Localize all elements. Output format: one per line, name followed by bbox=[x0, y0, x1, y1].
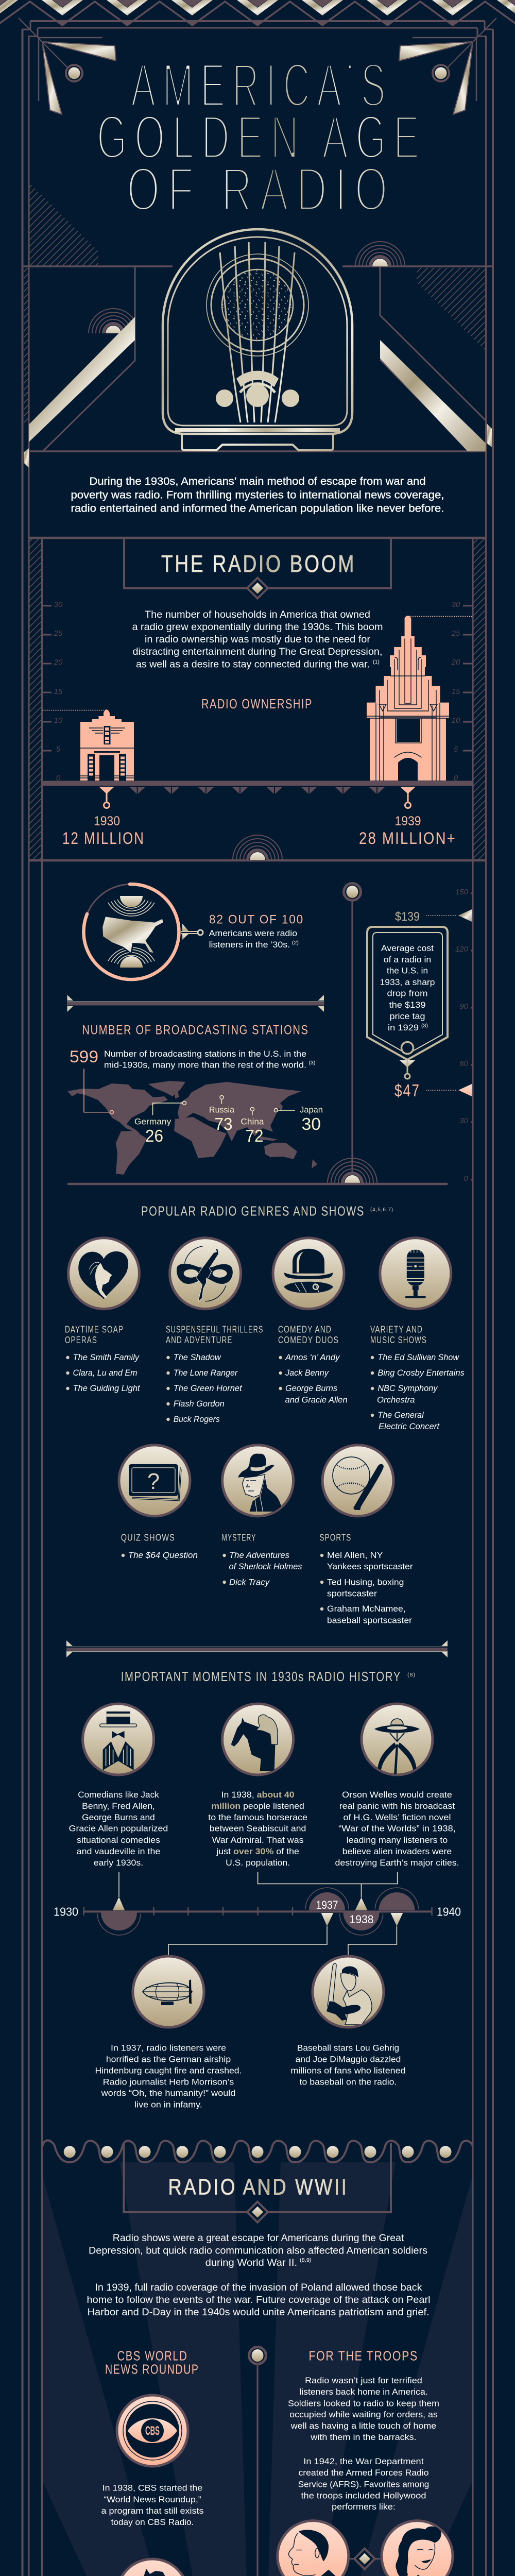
genre: sports bbox=[319, 1445, 413, 1625]
icon: mask and revolver bbox=[170, 1238, 241, 1309]
show list: Bing Crosby Entertains bbox=[377, 1368, 465, 1378]
text: real panic with his broadcast bbox=[339, 1802, 455, 1811]
performer connectors bbox=[302, 2549, 427, 2576]
icon: detective bbox=[222, 1445, 294, 1516]
title bbox=[97, 50, 426, 224]
show list bbox=[66, 1353, 141, 1393]
show list: Jack Benny bbox=[285, 1368, 330, 1378]
building: 1930 bbox=[80, 709, 134, 781]
icon: question card bbox=[119, 1445, 190, 1516]
show list: Amos ‘n’ Andy bbox=[285, 1353, 340, 1362]
us stat bbox=[70, 1047, 315, 1070]
moment: comedians bbox=[69, 1704, 168, 1868]
show list: Yankees sportscaster bbox=[327, 1562, 413, 1571]
moment: baseball bbox=[290, 1956, 406, 2087]
genre: soap operas bbox=[65, 1238, 141, 1393]
price axis bbox=[455, 888, 473, 1183]
title: OF RADIO bbox=[127, 155, 396, 224]
text: Americans were radio bbox=[209, 929, 297, 938]
ownership axis scales: 20 bbox=[54, 658, 63, 667]
text bbox=[208, 1790, 307, 1868]
label: SPORTS bbox=[319, 1533, 351, 1543]
text: well as having a little touch of home bbox=[290, 2421, 436, 2431]
heading: NUMBER OF BROADCASTING STATIONS bbox=[82, 1023, 309, 1038]
moment: war of the worlds bbox=[335, 1704, 459, 1868]
text: (2) bbox=[292, 940, 299, 946]
text: In 1938, CBS started the bbox=[102, 2484, 202, 2493]
hatched side bands bbox=[29, 538, 486, 860]
text bbox=[290, 2043, 406, 2087]
ownership axis scales: 30 bbox=[54, 600, 63, 609]
radio price column bbox=[328, 883, 473, 1208]
show list bbox=[222, 1551, 302, 1587]
text: today on CBS Radio. bbox=[111, 2518, 194, 2527]
ownership axis scales: 5 bbox=[454, 745, 458, 754]
paragraph: Harbor and D-Day in the 1940s would unite Americans patriotism and grief. bbox=[88, 2307, 430, 2318]
divider bbox=[67, 995, 324, 1012]
show list: George Burns bbox=[285, 1384, 337, 1393]
text: In 1938, about 40 bbox=[221, 1790, 295, 1800]
moment: hindenburg bbox=[95, 1956, 242, 2109]
$139 marker: $139 bbox=[395, 910, 420, 924]
building: 1939 bbox=[367, 616, 449, 781]
label: MYSTERY bbox=[221, 1533, 256, 1543]
text: a program that still exists bbox=[101, 2506, 204, 2516]
show list: Ted Husing, boxing bbox=[327, 1578, 404, 1587]
us stat: 599 bbox=[70, 1047, 98, 1066]
price callout: in 1929 bbox=[388, 1023, 419, 1032]
price axis: 150 bbox=[455, 888, 469, 896]
section rule bbox=[67, 1183, 448, 1185]
dotted level 1930 bbox=[42, 710, 106, 711]
show list: of Sherlock Holmes bbox=[229, 1562, 302, 1571]
text: leading many listeners to bbox=[347, 1836, 448, 1845]
art deco panels around the radio bbox=[23, 182, 492, 468]
text: performers like: bbox=[332, 2502, 396, 2512]
icon: martian tripod bbox=[362, 1704, 433, 1775]
section: radio and wwii bbox=[43, 2140, 473, 2576]
ownership axis scales: 25 bbox=[451, 629, 460, 638]
show list: and Gracie Allen bbox=[285, 1395, 348, 1404]
label: VARIETY AND bbox=[370, 1324, 423, 1334]
heading: FOR THE TROOPS bbox=[308, 2348, 418, 2364]
text: Benny, Fred Allen, bbox=[82, 1802, 155, 1811]
icon: horse and jockey bbox=[222, 1704, 294, 1775]
header decoration: chevrons and corner fans bbox=[0, 0, 515, 114]
text: the troops included Hollywood bbox=[301, 2492, 426, 2501]
price callout: Average cost bbox=[381, 944, 434, 953]
label bbox=[278, 1324, 339, 1345]
price callout bbox=[367, 927, 448, 1079]
show list bbox=[371, 1353, 465, 1431]
scallop border bbox=[43, 2140, 473, 2162]
text: occupied while waiting for orders, as bbox=[289, 2410, 438, 2419]
price axis: 30 bbox=[459, 1116, 469, 1125]
show list bbox=[320, 1551, 413, 1625]
text: situational comedies bbox=[77, 1836, 160, 1845]
icon: bowler hat and cigar bbox=[273, 1238, 344, 1309]
section: the radio boom bbox=[29, 538, 486, 885]
icon: question card: ? bbox=[147, 1469, 160, 1494]
price callout: the U.S. in bbox=[387, 967, 428, 976]
section: broadcasting stations bbox=[67, 1023, 323, 1175]
stat: 1939 bbox=[359, 814, 456, 848]
text: Orson Welles would create bbox=[342, 1790, 452, 1800]
text: Service (AFRS). Favorites among bbox=[298, 2480, 429, 2489]
show list: The Smith Family bbox=[73, 1353, 140, 1362]
show list: The Ed Sullivan Show bbox=[377, 1353, 459, 1362]
portrait: bob hope bbox=[278, 2521, 349, 2576]
show list: baseball sportscaster bbox=[327, 1616, 413, 1625]
show list bbox=[279, 1353, 348, 1404]
label: MUSIC SHOWS bbox=[370, 1335, 427, 1345]
text: “World News Roundup,” bbox=[104, 2495, 201, 2504]
price callout: drop from bbox=[387, 989, 427, 998]
label bbox=[370, 1324, 427, 1345]
map callouts: 30 bbox=[302, 1114, 321, 1133]
text: Soldiers looked to radio to keep them bbox=[288, 2399, 439, 2408]
timeline: 1938 bbox=[349, 1913, 374, 1926]
price callout: of a radio in bbox=[384, 955, 431, 964]
paragraph bbox=[132, 609, 383, 670]
text: horrified as the German airship bbox=[106, 2055, 231, 2064]
section heading box: RADIO AND WWII bbox=[168, 2174, 348, 2200]
radio illustration bbox=[163, 229, 352, 450]
text: George Burns and bbox=[82, 1813, 155, 1822]
text: and vaudeville in the bbox=[77, 1847, 160, 1856]
genre: comedy bbox=[273, 1238, 348, 1404]
world map bbox=[67, 1081, 317, 1175]
text: million people listened bbox=[211, 1802, 304, 1811]
heading: IMPORTANT MOMENTS IN 1930s RADIO HISTORY bbox=[121, 1669, 401, 1684]
icon: heart and woman bbox=[68, 1238, 139, 1309]
map callouts: Russia bbox=[209, 1106, 235, 1115]
icon: batter bbox=[313, 1956, 384, 2027]
text: believe alien invaders were bbox=[342, 1847, 452, 1856]
text: listeners in the ’30s. bbox=[209, 940, 290, 950]
paragraph: Depression, but quick radio communication also affected American soldiers bbox=[89, 2245, 427, 2256]
text: listeners back home in America. bbox=[299, 2387, 428, 2397]
text: destroying Earth’s major cities. bbox=[335, 1858, 459, 1868]
genre: thrillers bbox=[166, 1238, 264, 1424]
map callouts: Germany bbox=[134, 1117, 171, 1126]
show list: The Adventures bbox=[229, 1551, 289, 1560]
stat: 1930: 1930 bbox=[94, 814, 120, 828]
text: just over 30% of the bbox=[216, 1847, 299, 1856]
label: COMEDY AND bbox=[278, 1324, 332, 1334]
ownership axis scales: 0 bbox=[56, 774, 61, 783]
price callout: the $139 bbox=[389, 1001, 425, 1010]
show list: Graham McNamee, bbox=[327, 1604, 406, 1614]
text: millions of fans who listened bbox=[290, 2066, 406, 2075]
text: to baseball on the radio. bbox=[300, 2078, 397, 2087]
$139 marker bbox=[395, 909, 472, 924]
chart title: RADIO OWNERSHIP bbox=[201, 696, 313, 711]
ownership axis scales: 10 bbox=[452, 716, 460, 725]
timeline bbox=[54, 1872, 461, 1956]
arcs ornament bbox=[233, 835, 282, 885]
section: important moments timeline bbox=[54, 1669, 461, 2109]
ownership axis scales: 5 bbox=[56, 745, 61, 754]
show list: The General bbox=[377, 1411, 424, 1420]
section heading box: THE RADIO BOOM bbox=[161, 550, 356, 577]
paragraph: during World War II. bbox=[205, 2257, 297, 2268]
us stat: mid-1930s, many more than the rest of the world. bbox=[104, 1061, 306, 1070]
show list: Orchestra bbox=[377, 1395, 415, 1404]
text: Hindenburg caught fire and crashed. bbox=[95, 2066, 242, 2075]
timeline: 1930 bbox=[54, 1905, 78, 1918]
$47 marker: $47 bbox=[394, 1081, 420, 1100]
text: Radio journalist Herb Morrison’s bbox=[103, 2078, 234, 2087]
price callout: (3) bbox=[421, 1023, 428, 1029]
ownership axis scales: 30 bbox=[452, 600, 460, 609]
show list: The Lone Ranger bbox=[174, 1368, 238, 1378]
heading: POPULAR RADIO GENRES AND SHOWS bbox=[141, 1205, 365, 1219]
icon: airship bbox=[133, 1956, 204, 2027]
intro text: radio entertained and informed the American population like never before. bbox=[71, 503, 444, 515]
text: In 1942, the War Department bbox=[303, 2457, 424, 2466]
show list: Buck Rogers bbox=[174, 1415, 220, 1424]
label bbox=[65, 1324, 124, 1345]
label: COMEDY DUOS bbox=[278, 1335, 339, 1345]
map callouts: Japan bbox=[300, 1106, 323, 1115]
paragraph: (1) bbox=[373, 659, 380, 665]
ownership axis scales: 15 bbox=[54, 687, 63, 696]
text: and Joe DiMaggio dazzled bbox=[296, 2055, 401, 2064]
icon: baseball and bat bbox=[322, 1445, 393, 1516]
intro text: poverty was radio. From thrilling mysteries to international news coverage, bbox=[71, 489, 444, 501]
show list: The Green Hornet bbox=[174, 1384, 243, 1393]
stat: 1930: 12 MILLION bbox=[62, 829, 145, 848]
text: words “Oh, the humanity!” would bbox=[101, 2089, 235, 2098]
connector bbox=[181, 924, 203, 940]
show list: Dick Tracy bbox=[229, 1578, 270, 1587]
text bbox=[69, 1790, 168, 1868]
dotted level 1939 bbox=[408, 616, 473, 617]
divider bbox=[66, 1640, 448, 1657]
ownership axis scales: 10 bbox=[54, 716, 63, 725]
intro text: During the 1930s, Americans’ main method of escape from war and bbox=[90, 476, 425, 487]
text: 82 OUT OF 100 bbox=[209, 913, 304, 926]
ownership axis scales: 15 bbox=[452, 687, 460, 696]
paragraph: Radio shows were a great escape for Americans during the Great bbox=[113, 2232, 404, 2244]
price axis: 90 bbox=[459, 1002, 469, 1011]
us stat: Number of broadcasting stations in the U.S. in the bbox=[104, 1049, 306, 1059]
section: popular radio genres bbox=[65, 1205, 465, 1625]
show list: NBC Symphony bbox=[377, 1384, 438, 1393]
$47 marker bbox=[394, 1081, 472, 1100]
text: with them in the barracks. bbox=[310, 2433, 417, 2442]
text: created the Armed Forces Radio bbox=[299, 2468, 428, 2478]
text bbox=[288, 2376, 439, 2512]
ownership axis scales: 25 bbox=[54, 629, 63, 638]
center rail and pendant bbox=[249, 2347, 266, 2576]
us stat: (3) bbox=[309, 1060, 315, 1066]
paragraph: distracting entertainment during The Great Depression, bbox=[133, 646, 382, 657]
paragraph: in radio ownership was mostly due to the need for bbox=[145, 634, 371, 645]
paragraph: as well as a desire to stay connected during the war. bbox=[136, 658, 370, 670]
show list: The $64 Question bbox=[128, 1551, 198, 1560]
map callouts: 73 bbox=[214, 1114, 233, 1133]
text: of H.G. Wells’ fiction novel bbox=[343, 1813, 451, 1822]
text: to the famous horserace bbox=[208, 1813, 307, 1822]
portrait: dinah shore bbox=[382, 2521, 453, 2576]
timeline: 1937 bbox=[316, 1899, 338, 1911]
icon: cbs eye: CBS bbox=[145, 2424, 160, 2438]
price axis: 120 bbox=[455, 945, 469, 954]
stat: 1939: 1939 bbox=[394, 814, 421, 828]
timeline: 1940 bbox=[437, 1905, 461, 1918]
text bbox=[101, 2484, 204, 2527]
paragraph: a radio grew exponentially during the 1930s. This boom bbox=[132, 621, 383, 633]
text: Radio wasn’t just for terrified bbox=[305, 2376, 422, 2385]
paragraph: home to follow the events of the war. Future coverage of the attack on Pearl bbox=[87, 2294, 430, 2306]
text: “War of the Worlds” in 1938, bbox=[338, 1824, 456, 1834]
show list: Clara, Lu and Em bbox=[73, 1368, 137, 1378]
show list: sportscaster bbox=[327, 1589, 377, 1598]
genre: quiz shows bbox=[119, 1445, 198, 1560]
intro text bbox=[71, 476, 444, 515]
heading: (4,5,6,7) bbox=[370, 1207, 393, 1213]
icon: germany bbox=[117, 2559, 188, 2576]
heading: NEWS ROUNDUP bbox=[105, 2362, 199, 2377]
heading: (8) bbox=[407, 1672, 416, 1678]
column: for the troops bbox=[273, 2348, 453, 2576]
icon: microphone bbox=[380, 1238, 451, 1309]
paragraph bbox=[87, 2232, 430, 2318]
heading bbox=[105, 2348, 199, 2377]
stat: 82 out of 100 bbox=[83, 884, 304, 979]
section heading box bbox=[124, 2143, 391, 2223]
ownership axis scales: 0 bbox=[454, 774, 458, 783]
usa dial bbox=[83, 884, 179, 979]
text bbox=[95, 2043, 242, 2109]
paragraph: The number of households in America that owned bbox=[145, 609, 370, 620]
paragraph: In 1939, full radio coverage of the invasion of Poland allowed those back bbox=[95, 2282, 422, 2293]
show list: The Shadow bbox=[174, 1353, 221, 1362]
price axis: 60 bbox=[459, 1059, 469, 1068]
genre: variety bbox=[370, 1238, 465, 1431]
genre: mystery bbox=[221, 1445, 302, 1587]
stat: 1939: 28 MILLION+ bbox=[359, 829, 456, 848]
ownership axis scales: 20 bbox=[451, 658, 460, 667]
text bbox=[335, 1790, 459, 1868]
show list: Mel Allen, NY bbox=[327, 1551, 383, 1560]
icon: cbs eye bbox=[117, 2395, 188, 2466]
baseline axis with year markers bbox=[42, 781, 473, 808]
icon: hat, bow tie and vest bbox=[83, 1704, 154, 1775]
text: Gracie Allen popularized bbox=[69, 1824, 168, 1834]
sunburst rays bbox=[43, 2162, 472, 2576]
text: U.S. population. bbox=[226, 1858, 290, 1868]
label bbox=[166, 1324, 264, 1345]
column: cbs world news roundup bbox=[101, 2351, 203, 2576]
label: SUSPENSEFUL THRILLERS bbox=[166, 1324, 264, 1334]
show list: Electric Concert bbox=[379, 1422, 440, 1431]
show list: The Guiding Light bbox=[73, 1384, 141, 1393]
map callouts: 72 bbox=[245, 1126, 264, 1145]
text: Comedians like Jack bbox=[78, 1790, 160, 1800]
text: Baseball stars Lou Gehrig bbox=[297, 2043, 399, 2053]
map callouts: China bbox=[241, 1117, 264, 1126]
map callouts bbox=[84, 1069, 323, 1145]
price callout: 1933, a sharp bbox=[380, 978, 435, 987]
label: AND ADVENTURE bbox=[166, 1335, 233, 1345]
text: In 1937, radio listeners were bbox=[111, 2043, 226, 2053]
label: QUIZ SHOWS bbox=[121, 1533, 175, 1543]
stat: 1930 bbox=[62, 814, 145, 848]
price axis: 0 bbox=[464, 1174, 469, 1183]
text: War Admiral. That was bbox=[212, 1836, 304, 1845]
paragraph: (8,9) bbox=[300, 2257, 312, 2263]
show list: Flash Gordon bbox=[174, 1399, 225, 1409]
text: between Seabiscuit and bbox=[210, 1824, 306, 1834]
ownership axis scales bbox=[42, 600, 473, 783]
text: early 1930s. bbox=[94, 1858, 143, 1868]
section heading box bbox=[124, 538, 391, 599]
heading: CBS WORLD bbox=[117, 2348, 187, 2364]
map callouts: 26 bbox=[145, 1126, 163, 1145]
text bbox=[209, 913, 304, 950]
moment: seabiscuit bbox=[208, 1704, 307, 1868]
price callout: price tag bbox=[389, 1012, 425, 1021]
text: live on in infamy. bbox=[134, 2100, 202, 2109]
show list bbox=[166, 1353, 243, 1424]
label: DAYTIME SOAP bbox=[65, 1324, 124, 1334]
label: OPERAS bbox=[65, 1335, 97, 1345]
